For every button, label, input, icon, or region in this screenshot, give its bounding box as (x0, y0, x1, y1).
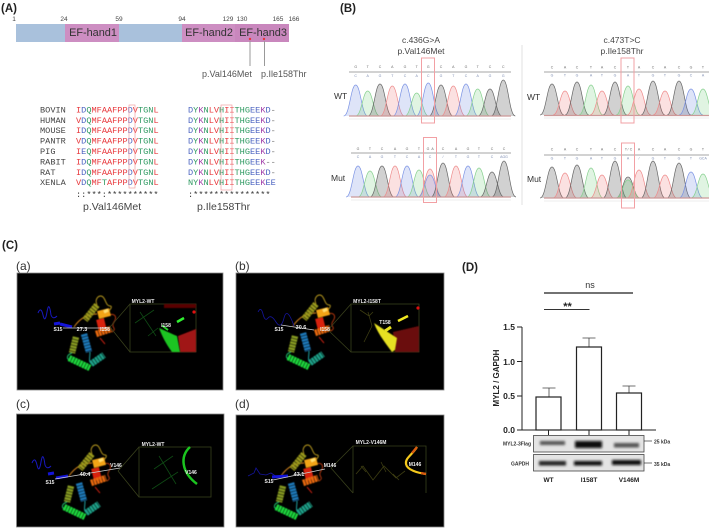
row label Mut: Mut (331, 173, 346, 183)
chromatograms: c.473T>C (522, 35, 709, 208)
heading c.473T>C (600, 35, 644, 56)
inset: M146 mutant (353, 440, 426, 493)
residue numbers: 130 (237, 16, 248, 23)
alignment around Val146 (76, 105, 159, 200)
alignment around Ile158: NYKNLVHIITHGEEKEE (188, 178, 276, 188)
row label Mut: Mut (527, 174, 542, 184)
inset: M146 mutant: M146 (409, 462, 421, 468)
species names: XENLA (40, 178, 67, 188)
alignment around Ile158: DYKNLVHIITHGEEKD- (188, 147, 276, 157)
x-axis labels (543, 477, 639, 484)
inset: I158 wild type: MYL2-WT (132, 299, 154, 305)
alignment around Val146: IEQMFAAFPPDVTGNL (76, 147, 159, 157)
western blot: GAPDH: 35 kDa (654, 462, 670, 468)
structure panel d: (d) (235, 397, 250, 411)
Mut trace: CACTACT/CACACGT (551, 148, 705, 152)
alignment around Ile158: :*************** (188, 190, 271, 200)
Mut trace: GTCAGTGACAGTCC (357, 147, 506, 151)
structure panel c (16, 397, 224, 527)
residue numbers: 59 (115, 16, 123, 23)
EF-hand1 domain: EF-hand1 (69, 27, 117, 39)
inset: I158 wild type: I158 (161, 323, 171, 329)
structure panel a: I158 (100, 327, 110, 333)
Mut trace: GTGATGA/GTGTGCA (551, 156, 707, 160)
panel label D: (D) (462, 262, 478, 274)
western blot: MYL2-3Flag (503, 436, 670, 452)
western blot: GAPDH (511, 454, 670, 471)
x-axis labels: V146M (619, 477, 639, 484)
bar: V146M (616, 386, 642, 430)
structure panel c: (c) (16, 397, 30, 411)
heading c.436G>A: c.436G>A (402, 35, 440, 45)
species names: PANTR (40, 136, 66, 146)
alignment around Ile158: DYKNLVHIITHGEEKD- (188, 168, 276, 178)
EF-hand1 domain (65, 24, 119, 42)
alignment around Ile158: DYKNLVHIITHGEEKD- (188, 116, 276, 126)
residue numbers: 166 (289, 16, 300, 23)
x-axis labels: I158T (581, 477, 597, 484)
inset: I158 wild type (130, 299, 196, 352)
alignment around Ile158: DYKNLVHIITHGEEKD- (188, 136, 276, 146)
residue numbers: 129 (223, 16, 234, 23)
structure panel b: (b) (235, 259, 250, 273)
WT trace: GTCAGTGCAGTCC (354, 65, 505, 69)
structure panel a: (a) (16, 259, 31, 273)
species names: MOUSE (40, 126, 66, 136)
panel label C: (C) (2, 240, 18, 252)
WT trace: CACTACTACACGT (551, 66, 705, 70)
alignment captions (83, 201, 251, 213)
structure panel a: S15 (54, 327, 63, 333)
panel label A: (A) (1, 3, 17, 15)
axes (503, 322, 656, 435)
alignment around Val146: VDQMFAAFPPDVTGNL (76, 116, 159, 126)
inset: V146 wild type: MYL2-WT (142, 442, 164, 448)
western blot: MYL2-3Flag: MYL2-3Flag (503, 442, 531, 448)
axes: 1.5 (503, 322, 515, 332)
structure panel b: I158 (320, 327, 330, 333)
alignment around Val146: VDQMFTAFPPDVTGNL (76, 178, 159, 188)
heading c.473T>C: p.Ile158Thr (600, 46, 644, 56)
structure panel d: 43.1 (294, 472, 304, 478)
species names: BOVIN (40, 106, 66, 116)
EF-hand2 domain (182, 24, 235, 42)
structure panel b: 30.6 (296, 325, 306, 331)
x-axis labels: WT (543, 477, 554, 484)
alignment around Val146: IDQMFAAFPPDVTGNL (76, 126, 159, 136)
structure panel d: M146 (324, 463, 336, 469)
significance brackets: ** (563, 301, 572, 313)
chromatograms: c.436G>A (331, 35, 516, 202)
species names: PIG (40, 147, 55, 157)
species names: RABIT (40, 157, 66, 167)
inset: M146 mutant: MYL2-V146M (356, 440, 386, 446)
alignment around Ile158 (188, 105, 276, 200)
alignment around Val146: IDQMFAAFPPDVTGNL (76, 157, 159, 167)
western blot: GAPDH: GAPDH (511, 462, 529, 468)
inset: T158 mutant: T158 (379, 320, 391, 326)
sequence alignment (40, 105, 276, 213)
WT trace (344, 58, 515, 123)
structure panel c: V146 (110, 463, 122, 469)
structure panel c: 40.4 (80, 472, 91, 478)
axes: 1.0 (503, 357, 515, 367)
inset: V146 wild type (139, 442, 211, 497)
Mut trace (540, 143, 709, 208)
alignment around Val146: IDQMFAAFPPDVTGNL (76, 106, 159, 116)
alignment around Val146: VDQMFAAFPPDVTGNL (76, 136, 159, 146)
alignment captions: p.Val146Met (83, 201, 141, 213)
species names: RAT (40, 168, 55, 178)
western blot: MYL2-3Flag: 25 kDa (654, 440, 670, 446)
heading c.436G>A: p.Val146Met (397, 46, 445, 56)
panel label B: (B) (340, 3, 356, 15)
residue numbers: 165 (273, 16, 284, 23)
structure panel b (235, 259, 444, 390)
bar: I158T (576, 338, 602, 430)
residue numbers: 24 (60, 16, 68, 23)
residue numbers (12, 16, 300, 23)
alignment around Ile158: DYKNLVHIITHGEEKD- (188, 106, 276, 116)
panel A: protein domain diagram (1, 3, 307, 79)
WT trace: CAGTCACGTCAGG (354, 74, 505, 78)
inset: T158 mutant (351, 299, 420, 352)
structure panel c: S15 (46, 480, 55, 486)
variant markers: p.Ile158Thr (261, 69, 307, 79)
alignment around Ile158: DYKNLVHIITHGEEK-- (188, 157, 276, 167)
Mut trace: CAGTCAC/TGTCAGG (357, 155, 508, 159)
species names (40, 106, 67, 188)
structure panel d: S15 (265, 479, 274, 485)
structure panel b: S15 (275, 327, 284, 333)
heading c.473T>C: c.473T>C (603, 35, 641, 45)
y-axis title: MYL2 / GAPDH (492, 349, 501, 406)
Mut trace (346, 138, 516, 202)
inset: T158 mutant: MYL2-I158T (353, 299, 381, 305)
structure panel a: 27.3 (77, 327, 87, 333)
bar: WT (536, 388, 561, 430)
alignment captions: p.Ile158Thr (197, 201, 251, 213)
EF-hand3 domain: EF-hand3 (239, 27, 287, 39)
axes: 0.0 (503, 425, 515, 435)
species names: HUMAN (40, 116, 66, 126)
domain bar (16, 24, 289, 42)
residue numbers: 94 (178, 16, 186, 23)
axes: 0.5 (503, 391, 515, 401)
EF-hand3 domain (235, 24, 289, 42)
inset: V146 wild type: V146 (185, 470, 197, 476)
heading c.436G>A (397, 35, 445, 56)
row label WT: WT (527, 92, 540, 102)
residue numbers: 1 (12, 16, 16, 23)
significance brackets: ns (585, 280, 595, 290)
structure panel d (235, 397, 444, 527)
alignment around Val146: ::***:********** (76, 190, 159, 200)
alignment around Val146: IDQMFAAFPPDVTGNL (76, 168, 159, 178)
structure panel a (16, 259, 223, 390)
EF-hand2 domain: EF-hand2 (185, 27, 233, 39)
alignment around Ile158: DYKNLVHIITHGEEKD- (188, 126, 276, 136)
panel D: bar chart and western blot (462, 262, 670, 484)
WT trace (540, 58, 709, 123)
WT trace: GTGATGATGTGCA (551, 74, 705, 78)
significance brackets (544, 280, 633, 313)
variant markers (202, 38, 307, 79)
variant markers: p.Val146Met (202, 69, 252, 79)
row label WT: WT (334, 91, 347, 101)
